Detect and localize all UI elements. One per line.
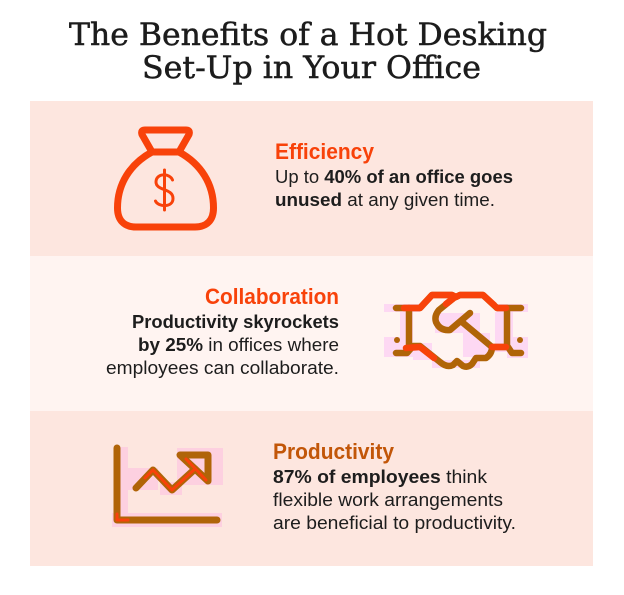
title: Set-Up in Your Office — [142, 50, 481, 86]
text: collaboration body: by 25% in offices where — [138, 334, 339, 355]
panel: collaboration — [30, 256, 593, 411]
text: productivity body: 87% of employees think — [273, 466, 488, 487]
text: productivity body: flexible work arrangements — [273, 489, 503, 510]
panel: productivity — [30, 411, 593, 566]
icon: handshake — [384, 295, 528, 368]
title — [69, 17, 547, 86]
text: efficiency body — [275, 166, 513, 210]
text: efficiency body: Up to 40% of an office goes — [275, 166, 513, 187]
icon: growth chart — [112, 447, 223, 527]
title: The Benefits of a Hot Desking — [69, 17, 547, 53]
text: efficiency body: unused at any given time. — [275, 189, 495, 210]
heading: efficiency: Efficiency — [275, 139, 375, 164]
text: collaboration body: Productivity skyrockets — [132, 311, 339, 332]
heading: collaboration: Collaboration — [205, 284, 339, 309]
text: collaboration body — [106, 311, 339, 378]
icon detail: left cuff dot — [394, 337, 400, 343]
icon: money bag — [118, 130, 214, 227]
panel: efficiency — [30, 101, 593, 256]
text: productivity body — [273, 466, 516, 533]
icon detail: right cuff dot — [517, 337, 523, 343]
text: productivity body: are beneficial to productivity. — [273, 512, 516, 533]
text: collaboration body: employees can collaborate. — [106, 357, 339, 378]
heading: productivity: Productivity — [273, 439, 395, 464]
